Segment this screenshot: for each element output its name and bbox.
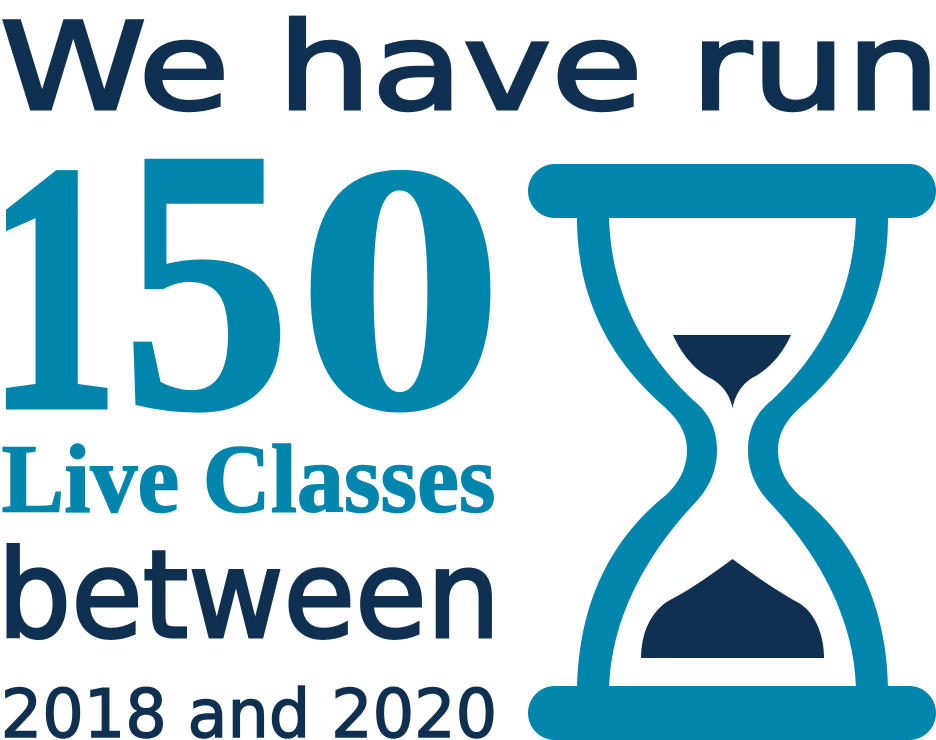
sand top xyxy=(673,335,791,408)
big number: 150: 0 xyxy=(296,92,504,484)
hourglass frame left xyxy=(577,210,717,694)
big number: 150: 5 xyxy=(122,73,291,489)
heading: We have run: We have run xyxy=(0,0,936,138)
icon: hourglass xyxy=(528,164,936,740)
hourglass top bar xyxy=(528,164,936,218)
big number: 150 xyxy=(0,73,504,489)
subheading: Live Classes: Live Classes xyxy=(2,426,496,532)
sand bottom xyxy=(641,559,824,658)
text: between: between xyxy=(0,525,500,666)
hourglass frame right xyxy=(748,210,888,694)
hourglass bottom bar xyxy=(528,686,936,740)
